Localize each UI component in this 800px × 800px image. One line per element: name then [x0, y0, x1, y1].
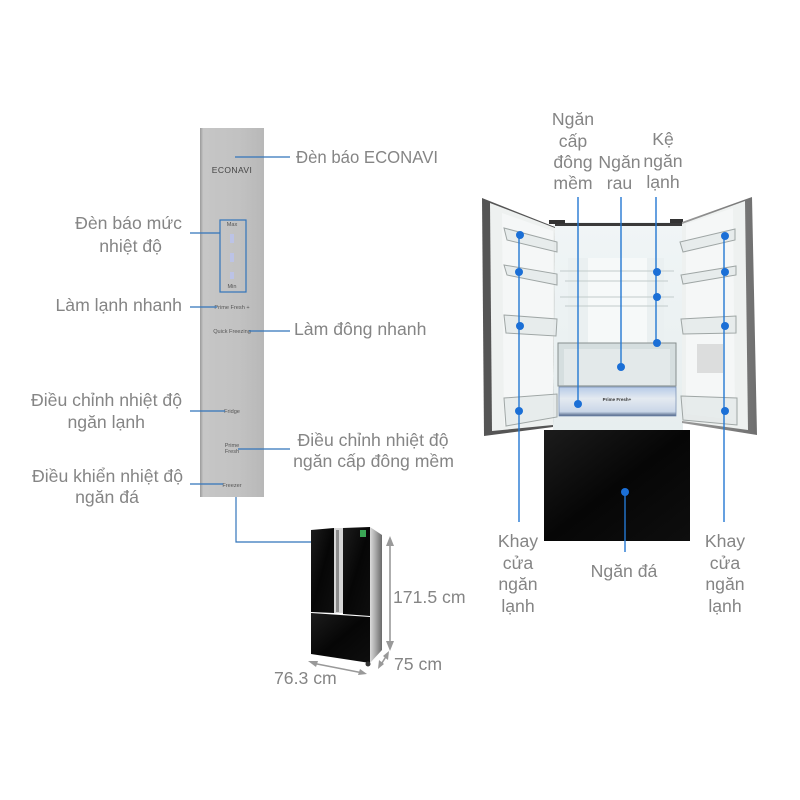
panel labels: controls: Min — [227, 284, 237, 290]
label: Ngăn cấp đông mềm: Ngăn — [552, 109, 594, 129]
callout lines: control panel — [190, 157, 341, 542]
label: Kệ ngăn lạnh: Kệ — [652, 129, 674, 149]
label: Làm đông nhanh: Làm đông nhanh — [294, 319, 426, 339]
prime fresh drawer: Prime Fresh+ — [603, 397, 632, 402]
control panel — [200, 128, 264, 497]
right door — [680, 197, 757, 435]
small fridge image — [311, 527, 382, 666]
label: Điều khiển nhiệt độ ngăn đá: Điều khiển nhiệt độ — [32, 466, 183, 486]
fridge interior — [549, 219, 683, 430]
label: Đèn báo mức nhiệt độ: Đèn báo mức — [75, 213, 182, 233]
label: Đèn báo mức nhiệt độ: nhiệt độ — [99, 236, 162, 256]
temperature indicator lights — [230, 234, 234, 279]
label: Ngăn cấp đông mềm: đông — [553, 152, 593, 172]
label: Khay cửa ngăn lạnh (right): Khay — [705, 531, 745, 551]
label: Kệ ngăn lạnh: ngăn — [643, 151, 683, 171]
panel labels: controls: Quick Freezing — [213, 329, 251, 335]
label: Điều chỉnh nhiệt độ ngăn lạnh: ngăn lạnh — [68, 412, 145, 432]
dimension: height: 171.5 cm — [393, 587, 466, 607]
dimension arrows — [308, 536, 394, 675]
left door — [482, 198, 557, 436]
panel labels: controls: Fridge — [224, 409, 240, 415]
prime fresh drawer — [559, 387, 676, 416]
label: Ngăn cấp đông mềm — [552, 109, 594, 193]
large open fridge — [482, 197, 757, 541]
label: Ngăn cấp đông mềm: mềm — [553, 173, 593, 193]
label: Khay cửa ngăn lạnh (right): ngăn — [705, 574, 745, 594]
label: Khay cửa ngăn lạnh (left) — [498, 531, 538, 616]
label: Khay cửa ngăn lạnh (left): lạnh — [501, 596, 535, 616]
dimension: width: 76.3 cm — [274, 668, 337, 688]
label: Điều chỉnh nhiệt độ ngăn lạnh — [31, 390, 182, 432]
panel label: ECONAVI: ECONAVI — [212, 165, 252, 175]
panel labels: controls: Freezer — [222, 483, 242, 489]
label: Ngăn rau: rau — [607, 173, 632, 193]
panel labels: controls: Fresh — [225, 449, 239, 455]
callout dots — [515, 231, 729, 496]
callout lines: large fridge — [519, 197, 724, 552]
label: Đèn báo mức nhiệt độ — [75, 213, 182, 256]
label: Khay cửa ngăn lạnh (left): ngăn — [498, 574, 538, 594]
label: Khay cửa ngăn lạnh (left): Khay — [498, 531, 538, 551]
panel labels: controls: Max — [227, 222, 237, 228]
vegetable drawer — [558, 343, 676, 386]
label: Điều chỉnh nhiệt độ ngăn cấp đông mềm: ngăn cấp đông mềm — [293, 451, 454, 471]
label: Khay cửa ngăn lạnh (left): cửa — [503, 553, 533, 573]
label: Khay cửa ngăn lạnh (right): lạnh — [708, 596, 742, 616]
freezer drawer — [544, 430, 690, 541]
label: Điều chỉnh nhiệt độ ngăn cấp đông mềm — [293, 430, 454, 471]
label: Điều khiển nhiệt độ ngăn đá: ngăn đá — [75, 487, 139, 507]
label: Làm lạnh nhanh: Làm lạnh nhanh — [55, 295, 182, 315]
label: Ngăn rau: Ngăn — [598, 152, 641, 172]
panel labels: controls: Prime Fresh + — [214, 305, 250, 311]
label: Điều khiển nhiệt độ ngăn đá — [32, 466, 183, 507]
label: Kệ ngăn lạnh — [643, 129, 683, 192]
door sticker — [697, 344, 723, 373]
panel labels: controls: Prime — [225, 443, 239, 449]
label: Khay cửa ngăn lạnh (right): cửa — [710, 553, 740, 573]
label: Kệ ngăn lạnh: lạnh — [646, 172, 680, 192]
label: Khay cửa ngăn lạnh (right) — [705, 531, 745, 616]
panel labels: controls — [213, 222, 251, 489]
label: Điều chỉnh nhiệt độ ngăn lạnh: Điều chỉnh nhiệt độ — [31, 390, 182, 410]
dimension: depth: 75 cm — [394, 654, 442, 674]
label: Ngăn cấp đông mềm: cấp — [559, 131, 587, 151]
label: Ngăn đá: Ngăn đá — [591, 561, 658, 581]
label: Điều chỉnh nhiệt độ ngăn cấp đông mềm: Điều chỉnh nhiệt độ — [297, 430, 449, 450]
label: Đèn báo ECONAVI: Đèn báo ECONAVI — [296, 147, 438, 167]
label: Ngăn rau — [598, 152, 641, 193]
